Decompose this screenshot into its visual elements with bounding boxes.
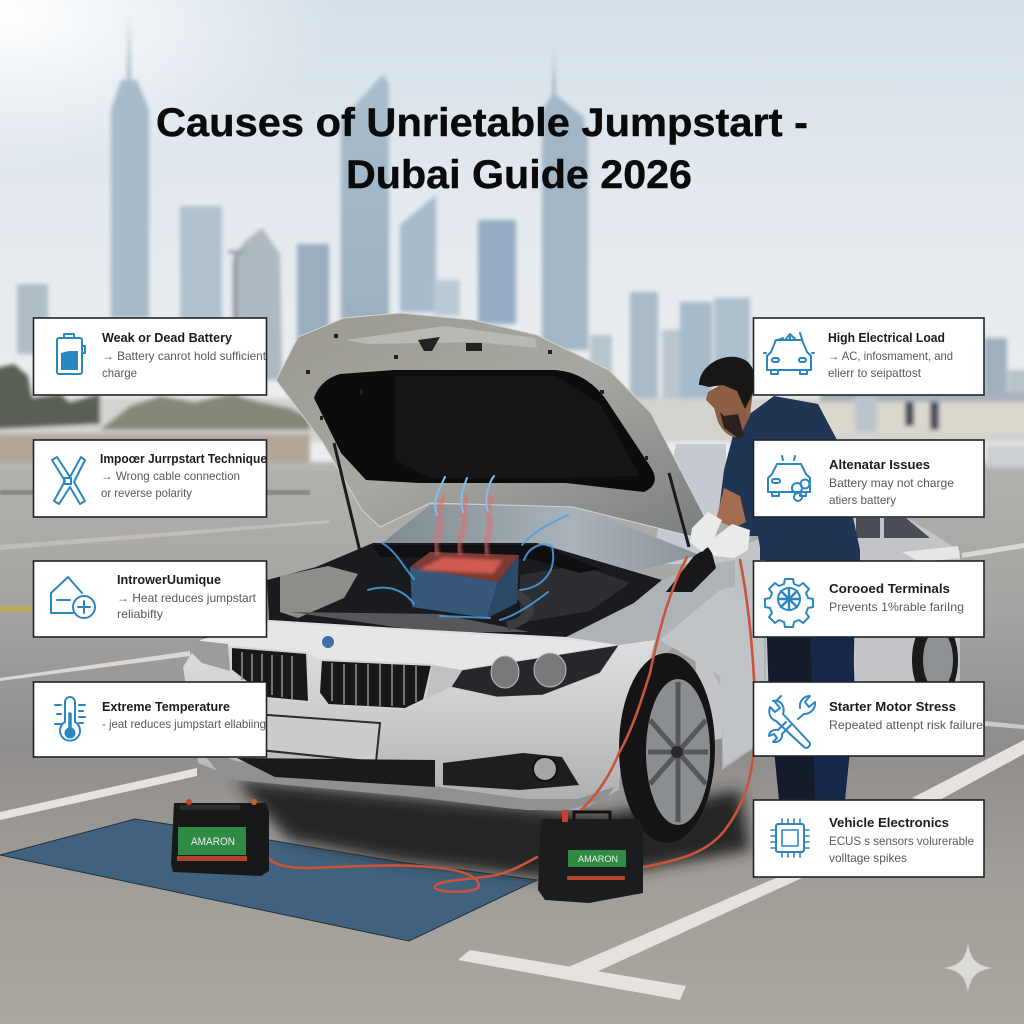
icon: gear bbox=[765, 579, 813, 627]
panel: vehicle electronics: volltage spikes bbox=[829, 851, 907, 865]
panel: vehicle electronics: Vehicle Electronics bbox=[829, 816, 949, 830]
icon: car with alternator bbox=[768, 456, 810, 501]
icon: thermometer bbox=[55, 697, 85, 741]
icon: battery bbox=[57, 334, 85, 374]
car front body bbox=[183, 620, 655, 811]
panel: extreme temperature: - jeat reduces jumpstart ellabiing bbox=[102, 717, 266, 731]
panel: corroded terminals bbox=[754, 561, 984, 637]
jumper cables bbox=[267, 557, 755, 892]
panel: improper jumpstart technique: → Wrong cable connection bbox=[101, 469, 240, 483]
panel: high electrical load bbox=[754, 318, 984, 395]
heat and electric effects on battery bbox=[368, 476, 568, 620]
floor mat bbox=[0, 819, 537, 941]
icon: crossed clamps bbox=[52, 457, 85, 504]
panel: alternator issues bbox=[754, 440, 984, 517]
city skyline bbox=[17, 15, 1024, 440]
panel: extreme temperature bbox=[34, 682, 266, 757]
right fender and door bbox=[562, 560, 766, 770]
panel: alternator issues: Altenatar Issues bbox=[829, 458, 930, 472]
panel: improper jumpstart technique bbox=[34, 440, 267, 517]
sky background bbox=[0, 0, 1024, 470]
icon: car with arrows bbox=[764, 333, 814, 374]
gloves and clamp bbox=[666, 512, 750, 592]
icon: microchip bbox=[771, 819, 809, 857]
parking lines bbox=[0, 520, 1024, 1000]
panel: intro heat: reliabifty bbox=[117, 607, 163, 621]
front wheel bbox=[619, 653, 715, 843]
mechanic bbox=[699, 357, 860, 800]
car shadow bbox=[235, 780, 750, 878]
panel: vehicle electronics bbox=[754, 800, 984, 877]
panel: extreme temperature: Extreme Temperature bbox=[102, 700, 230, 714]
icon: sparkle watermark bbox=[944, 944, 992, 992]
icon: wrench and screwdriver bbox=[769, 696, 815, 748]
panel: high electrical load: → AC, infosmament, and bbox=[828, 349, 953, 363]
title: Causes of Unrietable Jumpstart - bbox=[156, 101, 808, 145]
right battery with Amaron label bbox=[538, 810, 643, 903]
panel: high electrical load: High Electrical Load bbox=[828, 331, 945, 345]
left battery with Amaron label bbox=[171, 799, 269, 876]
windshield bbox=[380, 505, 700, 570]
panel: starter motor stress: Starter Motor Stress bbox=[829, 700, 956, 714]
title bbox=[156, 101, 808, 197]
panel: high electrical load: elierr to seipattost bbox=[828, 366, 922, 380]
panel: corroded terminals: Prevents 1%rable fariIng bbox=[829, 600, 964, 614]
panel: improper jumpstart technique: Impoœr Jurrpstart Technique bbox=[100, 452, 267, 466]
panel: weak or dead battery bbox=[34, 318, 267, 395]
panel: alternator issues: atiers battery bbox=[829, 493, 896, 507]
panel: weak or dead battery: charge bbox=[102, 366, 137, 380]
panel: starter motor stress: Repeated attenpt risk failure bbox=[829, 718, 983, 732]
headlights and grille bbox=[190, 635, 619, 790]
panel: alternator issues: Battery may not charge bbox=[829, 476, 954, 490]
panel: intro heat bbox=[34, 561, 266, 637]
title: Dubai Guide 2026 bbox=[346, 153, 692, 197]
distant trees and road bbox=[0, 364, 1024, 502]
panel: intro heat: IntrowerUumique bbox=[117, 573, 221, 587]
left battery with Amaron label: AMARON bbox=[191, 836, 235, 848]
panel: improper jumpstart technique: or reverse polarity bbox=[101, 486, 192, 500]
panel: weak or dead battery: Weak or Dead Battery bbox=[102, 331, 232, 345]
panel: starter motor stress bbox=[754, 682, 984, 756]
panel: weak or dead battery: → Battery canrot hold sufficient bbox=[102, 349, 267, 363]
car rear body bbox=[651, 444, 960, 743]
icon: house with plus circle bbox=[51, 577, 95, 618]
panel: intro heat: → Heat reduces jumpstart bbox=[117, 591, 257, 605]
parking lot ground bbox=[0, 470, 1024, 1024]
right battery with Amaron label: AMARON bbox=[578, 854, 618, 865]
panel: vehicle electronics: ECUS s sensors volurerable bbox=[829, 834, 974, 848]
open hood bbox=[276, 313, 705, 560]
panel: corroded terminals: Corooed Terminals bbox=[829, 582, 950, 596]
engine bay bbox=[267, 543, 662, 637]
